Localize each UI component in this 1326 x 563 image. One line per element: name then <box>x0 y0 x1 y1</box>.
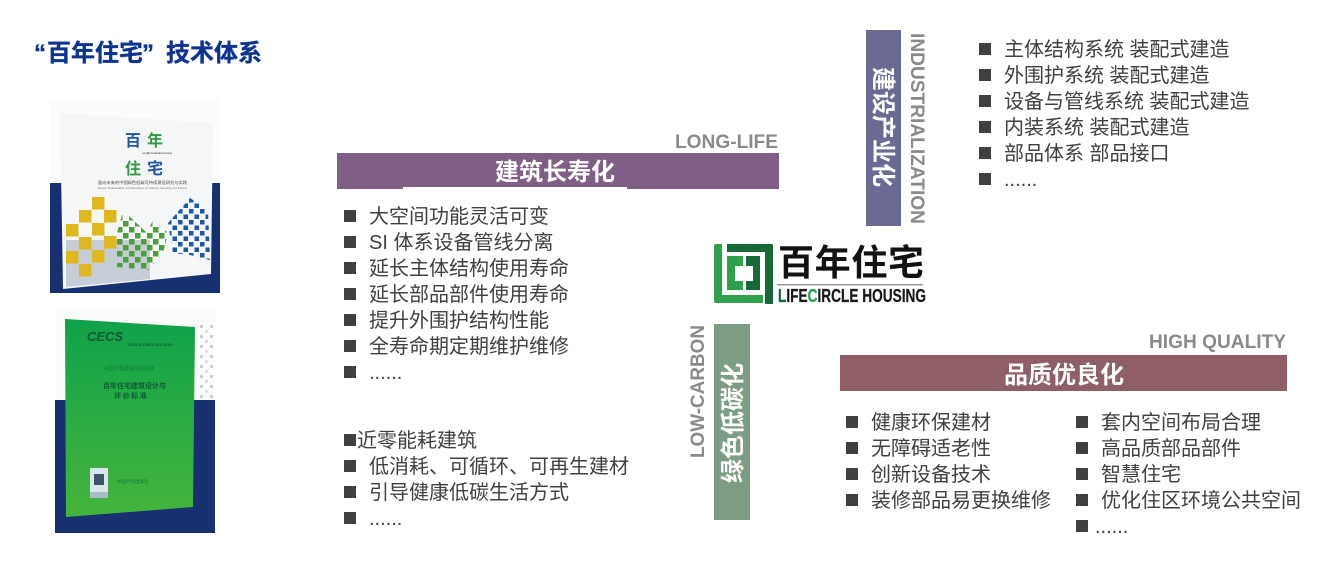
book cover: 百年住宅: 面向未来的中国绿色低碳可持续建设研究与实践 <box>98 179 188 186</box>
list: 建筑长寿化: ...... <box>369 362 402 384</box>
book cover: 评价标准: 评 价 标 准 <box>114 391 147 401</box>
list: 品质优良化 right: 优化住区环境公共空间 <box>1101 489 1301 512</box>
list: 品质优良化 right: 智慧住宅 <box>1101 463 1181 486</box>
list: 建设产业化: 外围护系统 装配式建造 <box>1004 64 1210 87</box>
list: 建设产业化: 设备与管线系统 装配式建造 <box>1004 90 1250 113</box>
banner: 建设产业化: 建设产业化 <box>868 67 903 187</box>
title: 百年住宅 <box>47 39 143 67</box>
book cover: 百年住宅 <box>50 99 220 293</box>
list: 建筑长寿化: 提升外围护结构性能 <box>369 309 549 332</box>
list: 低碳: 引导健康低碳生活方式 <box>369 481 569 504</box>
list: 低碳 <box>344 429 629 530</box>
list: 品质优良化 left: 健康环保建材 <box>871 411 991 434</box>
list: 建设产业化: 部品体系 部品接口 <box>1004 142 1170 165</box>
english label: LONG-LIFE: LONG-LIFE <box>675 132 778 153</box>
list: 品质优良化 right <box>1076 411 1301 538</box>
logo: 百年住宅 LifeCircle Housing: LIFECIRCLE HOUSING <box>778 286 926 306</box>
title: 技术体系 <box>166 40 262 67</box>
book cover: 百年住宅: 住 <box>125 155 141 179</box>
book cover: 评价标准: T/CECS CRES 313-2018 <box>127 342 173 347</box>
list: 建筑长寿化: 大空间功能灵活可变 <box>369 205 549 228</box>
list: 建设产业化: 主体结构系统 装配式建造 <box>1004 38 1230 61</box>
title: ” <box>142 40 154 67</box>
list: 建筑长寿化 <box>344 205 569 384</box>
list: 品质优良化 left: 装修部品易更换维修 <box>871 489 1051 512</box>
book cover: 评价标准: 中国计划出版社 <box>117 478 149 485</box>
list: 建设产业化 <box>979 38 1250 191</box>
banner: 品质优良化: 品质优良化 <box>1004 355 1124 390</box>
english label: LOW-CARBON: LOW-CARBON <box>688 325 709 458</box>
list: 低碳: ...... <box>369 508 402 530</box>
list: 品质优良化 left <box>846 411 1051 512</box>
list: 建筑长寿化: 延长部品部件使用寿命 <box>369 283 569 306</box>
list: 品质优良化 right: 高品质部品部件 <box>1101 437 1241 460</box>
book cover: 评价标准: 百年住宅建筑设计与 <box>103 381 166 391</box>
list: 建筑长寿化: 延长主体结构使用寿命 <box>369 257 569 280</box>
book cover: 百年住宅: 宅 <box>147 155 163 179</box>
banner: 建筑长寿化: 建筑长寿化 <box>495 152 615 187</box>
list: 建设产业化: 内装系统 装配式建造 <box>1004 116 1190 139</box>
banner: 品质优良化 <box>840 355 1287 391</box>
book cover: 百年住宅: 年 <box>147 127 163 151</box>
logo: 百年住宅 LifeCircle Housing: 百年住宅 <box>778 234 924 286</box>
book cover: 评价标准 <box>55 308 215 533</box>
book cover: 评价标准: 中国工程建设协会标准 <box>104 365 154 372</box>
english label: INDUSTRIALIZATION: INDUSTRIALIZATION <box>906 33 927 224</box>
book cover: 百年住宅: 百 <box>125 127 141 151</box>
banner: 建设产业化 <box>866 30 903 226</box>
book cover: 百年住宅: Longlife Sustainable Housing <box>142 151 172 155</box>
banner: 绿色低碳化 <box>713 324 750 520</box>
list: 建设产业化: ...... <box>1004 169 1037 191</box>
list: 品质优良化 right: ...... <box>1095 516 1128 538</box>
list: 低碳: 低消耗、可循环、可再生建材 <box>369 455 629 478</box>
list: 建筑长寿化: 全寿命期定期维护维修 <box>369 335 569 358</box>
list: 品质优良化 left: 创新设备技术 <box>871 463 991 486</box>
list: 品质优良化 right: 套内空间布局合理 <box>1101 411 1261 434</box>
list: 低碳: 近零能耗建筑 <box>357 429 477 452</box>
list: 品质优良化 left: 无障碍适老性 <box>871 437 991 460</box>
list: 建筑长寿化: SI 体系设备管线分离 <box>369 231 553 254</box>
book cover: 评价标准: CECS <box>87 329 123 344</box>
banner: 绿色低碳化: 绿色低碳化 <box>713 363 748 483</box>
book cover: 百年住宅: Green Sustainable Construction of China's Housing for Future <box>98 186 187 190</box>
logo: 百年住宅 LifeCircle Housing <box>714 234 926 306</box>
english label: HIGH QUALITY: HIGH QUALITY <box>1149 332 1286 353</box>
title: “ <box>34 40 46 67</box>
banner: 建筑长寿化 <box>337 152 779 189</box>
